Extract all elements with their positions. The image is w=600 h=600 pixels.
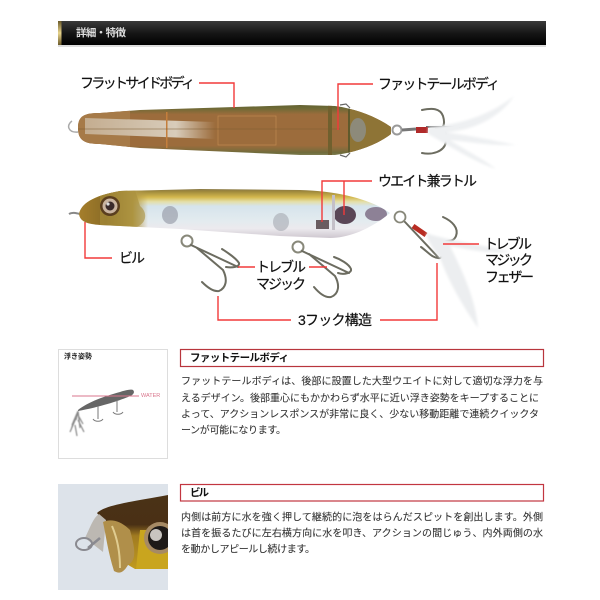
body text: よって、アクションレスポンスが非常に良く、少ない移動距離で連続クイックタ: [181, 408, 539, 420]
callout: treble magic feather: フェザー: [485, 269, 534, 285]
panel: fat tail body text: [180, 350, 544, 436]
line eye: [69, 213, 80, 214]
middle treble hook: [292, 242, 351, 297]
body: [78, 105, 391, 155]
body text: を動かしアピールし続けます。: [181, 542, 315, 556]
callout: fat tail body: [338, 76, 500, 130]
body text: ーンが可能になります。: [181, 424, 286, 436]
callout: treble magic feather: マジック: [485, 252, 533, 268]
callout: treble magic feather: トレブル: [484, 236, 532, 252]
callout: bill: ビル: [119, 250, 145, 266]
callout: weight and rattle: ウエイト兼ラトル: [378, 173, 477, 189]
panel: bill close-up image: [58, 484, 176, 590]
header bar: [58, 21, 546, 47]
lure silhouette: [70, 390, 134, 436]
line eye: [69, 121, 78, 132]
tail ring and treble hook: [392, 109, 460, 154]
callout: bill: [85, 222, 145, 266]
title box: ビル: [190, 486, 210, 499]
callout: flat side body: フラットサイドボディ: [80, 75, 195, 91]
title box: ファットテールボディ: [190, 351, 289, 364]
panel: bill text: [180, 484, 544, 556]
callout: treble magic: [238, 259, 327, 292]
line eye: [76, 538, 92, 550]
callout: treble magic: マジック: [256, 276, 306, 292]
rear treble hook: [394, 212, 457, 258]
title box: [180, 350, 544, 366]
clear lip: [85, 514, 106, 552]
callout: three hook structure: [218, 263, 437, 328]
lure: top view: [69, 96, 516, 169]
belly hook stubs: [340, 104, 350, 157]
feather: [428, 96, 516, 169]
front treble hook: [182, 236, 239, 291]
eye: [144, 522, 168, 554]
panel: floating posture image: [58, 350, 168, 458]
body: [79, 189, 390, 238]
body text: は首を振るたびに左右横方向に水を叩き、アクションの間じゅう、内外両側の水: [181, 526, 543, 540]
callout: fat tail body: ファットテールボディ: [378, 76, 500, 92]
water line: WATER: [141, 393, 160, 399]
label: floating posture: 浮き姿勢: [64, 352, 92, 360]
eye: [100, 196, 120, 216]
body text: [181, 510, 543, 556]
lure: side view: [69, 186, 510, 328]
body text: ファットテールボディは、後部に設置した大型ウエイトに対して適切な浮力を与: [181, 374, 543, 388]
body text: 内側は前方に水を強く押して継続的に泡をはらんだスピットを創出します。外側: [181, 510, 543, 524]
rear feather: [426, 233, 510, 328]
callout: three hook structure: 3フック構造: [298, 312, 372, 328]
callout: weight and rattle: [322, 173, 477, 222]
body text: えるデザイン。後部重心にもかかわらず水平に近い浮き姿勢をキープすることに: [181, 392, 539, 404]
body text: [181, 374, 543, 436]
title box: [180, 484, 544, 501]
callout: flat side body: [80, 75, 234, 108]
callout: treble magic: トレブル: [256, 259, 306, 275]
heading: 詳細・特徴: [76, 26, 126, 39]
callout: treble magic feather: [443, 236, 534, 285]
lure head: [97, 495, 168, 569]
